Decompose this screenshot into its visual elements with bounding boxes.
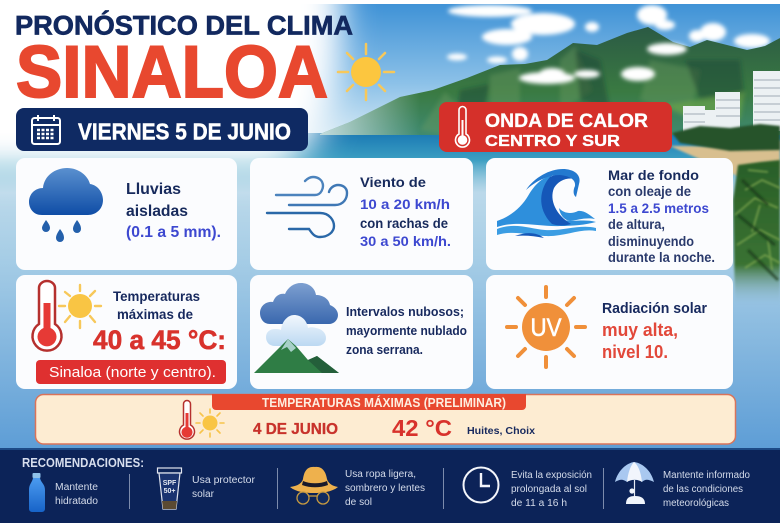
icon: water bottle bbox=[29, 473, 45, 512]
panel: rain: (0.1 a 5 mm). bbox=[126, 224, 221, 241]
panel: swell: Mar de fondo bbox=[608, 167, 699, 183]
icon: thermometer and sun bbox=[32, 281, 101, 351]
tip: stay informed bbox=[663, 470, 750, 509]
icon: sunscreen: SPF bbox=[163, 480, 177, 487]
banner: preliminary max temperatures: Huites, Choix bbox=[467, 425, 535, 437]
panel: clouds bbox=[250, 275, 473, 389]
icon: thermometer bbox=[456, 107, 470, 147]
label: Sinaloa north and centre bbox=[36, 360, 226, 384]
panel: temperatures: máximas de bbox=[117, 307, 193, 322]
panel: swell: con oleaje de bbox=[608, 184, 691, 199]
panel: swell: de altura, bbox=[608, 217, 665, 232]
date badge bbox=[16, 108, 308, 151]
panel: swell: durante la noche. bbox=[608, 250, 715, 265]
tip: clothing: Usa ropa ligera, bbox=[345, 469, 416, 480]
banner heading tab: TEMPERATURAS MÁXIMAS (PRELIMINAR) bbox=[262, 395, 506, 410]
icon: UV sun: UV bbox=[530, 314, 562, 342]
panel: swell bbox=[486, 158, 733, 270]
banner: preliminary max temperatures: 42 °C bbox=[392, 415, 452, 441]
tip: clothing: sombrero y lentes bbox=[345, 483, 425, 494]
icon: rain cloud bbox=[29, 168, 103, 242]
icon: hat and sunglasses bbox=[290, 467, 338, 504]
footer: recommendations: RECOMENDACIONES: bbox=[22, 456, 144, 470]
tip: stay informed: meteorológicas bbox=[663, 498, 729, 509]
panel: clouds: Intervalos nubosos; bbox=[346, 305, 464, 319]
panel: clouds: mayormente nublado bbox=[346, 324, 467, 338]
panel: temperatures bbox=[16, 275, 237, 389]
panel: swell: disminuyendo bbox=[608, 234, 694, 249]
date badge: VIERNES 5 DE JUNIO bbox=[78, 118, 291, 144]
label: Sinaloa north and centre: Sinaloa (norte y centro). bbox=[49, 364, 216, 381]
tip: clothing bbox=[345, 469, 425, 508]
tip: sunscreen: Usa protector bbox=[192, 475, 256, 486]
tip: hydrate bbox=[55, 482, 98, 507]
icon: thermometer and sun bbox=[180, 400, 224, 439]
icon: wave bbox=[497, 169, 596, 238]
tip: hydrate: Mantente bbox=[55, 482, 98, 493]
icon: clouds over mountain bbox=[254, 283, 339, 373]
tip: avoid sun: prolongada al sol bbox=[511, 484, 587, 495]
tip: avoid sun bbox=[511, 470, 592, 509]
tip: stay informed: Mantente informado bbox=[663, 470, 750, 481]
panel: UV radiation: muy alta, bbox=[602, 320, 678, 340]
panel: rain bbox=[16, 158, 237, 270]
panel: swell: 1.5 a 2.5 metros bbox=[608, 201, 709, 216]
heat wave badge bbox=[439, 102, 672, 152]
icon: wind bbox=[267, 177, 347, 237]
tip: clothing: de sol bbox=[345, 497, 372, 508]
tip: sunscreen bbox=[192, 475, 256, 500]
panel: wind: 10 a 20 km/h bbox=[360, 196, 450, 212]
panel: temperatures: 40 a 45 °C: bbox=[93, 325, 226, 355]
icon: clock bbox=[464, 468, 498, 502]
icon: calendar bbox=[32, 115, 60, 144]
icon: sun bbox=[338, 44, 394, 100]
tip: sunscreen: solar bbox=[192, 489, 215, 500]
icon: UV sun bbox=[507, 287, 585, 367]
panel: temperatures: Temperaturas bbox=[113, 289, 200, 304]
title: PRONÓSTICO DEL CLIMA bbox=[15, 10, 353, 40]
heat wave badge: CENTRO Y SUR bbox=[485, 133, 620, 150]
panel: rain: Lluvias bbox=[126, 181, 181, 198]
banner: preliminary max temperatures bbox=[36, 394, 736, 444]
panel: UV radiation: nivel 10. bbox=[602, 342, 668, 362]
banner: preliminary max temperatures: 4 DE JUNIO bbox=[253, 421, 338, 438]
panel: UV radiation bbox=[486, 275, 733, 389]
icon: sunscreen bbox=[158, 468, 182, 509]
tip: hydrate: hidratado bbox=[55, 496, 98, 507]
panel: wind: Viento de bbox=[360, 174, 426, 190]
tip: avoid sun: de 11 a 16 h bbox=[511, 498, 567, 509]
panel: UV radiation: Radiación solar bbox=[602, 300, 707, 317]
panel: wind: con rachas de bbox=[360, 215, 448, 231]
heat wave badge: ONDA DE CALOR bbox=[485, 111, 648, 132]
icon: umbrella and person bbox=[615, 462, 654, 504]
footer: recommendations bbox=[0, 448, 780, 523]
tip: stay informed: de las condiciones bbox=[663, 484, 743, 495]
heading: SINALOA: SINALOA bbox=[16, 32, 328, 113]
panel: wind bbox=[250, 158, 473, 270]
panel: clouds: zona serrana. bbox=[346, 343, 423, 357]
tip: avoid sun: Evita la exposición bbox=[511, 470, 592, 481]
icon: sunscreen: 50+ bbox=[164, 488, 175, 495]
panel: wind: 30 a 50 km/h. bbox=[360, 233, 451, 249]
panel: rain: aisladas bbox=[126, 203, 188, 220]
